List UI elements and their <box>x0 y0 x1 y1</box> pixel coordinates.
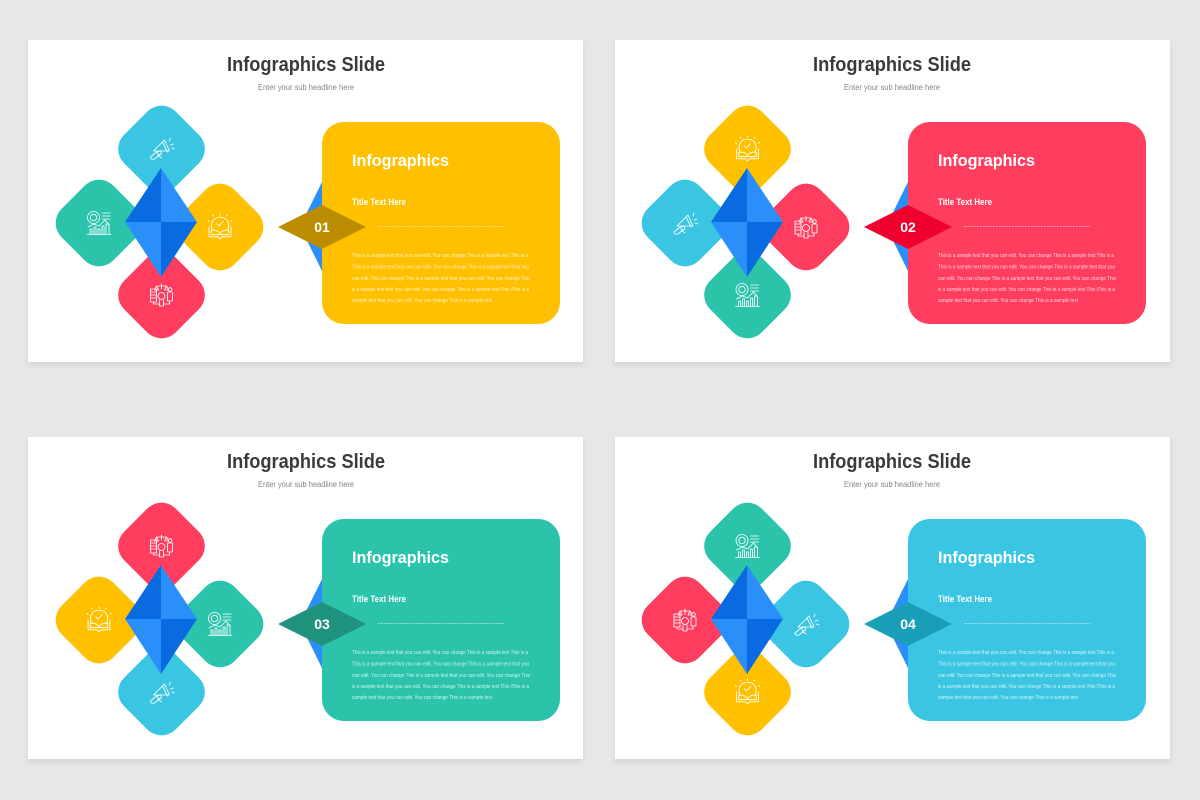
diamond: left book <box>47 568 151 672</box>
card <box>322 122 560 324</box>
card heading: Infographics <box>938 151 1035 170</box>
diamond: left chart <box>47 171 151 275</box>
diamond: right chart <box>168 572 272 676</box>
card body text: sample text that you can edit. You can change This is a sample text <box>938 298 1079 304</box>
card subtitle: Title Text Here <box>352 197 406 207</box>
card body text: This is a sample text that you can edit. You can change This is a sample text that you <box>352 662 529 668</box>
title: Infographics Slide <box>813 54 971 76</box>
number badge 03 <box>278 602 366 646</box>
panel: slide background <box>615 437 1170 759</box>
card body text <box>352 650 530 701</box>
diamond: bottom people <box>110 243 213 347</box>
panel: slide background <box>615 40 1170 362</box>
card subtitle: Title Text Here <box>938 594 992 604</box>
centre blue diamond <box>125 565 197 674</box>
subtitle: Enter your sub headline here <box>844 479 940 489</box>
card subtitle: Title Text Here <box>352 594 406 604</box>
diamond: bottom book <box>696 640 799 744</box>
number badge 04: 04 <box>900 616 916 632</box>
diamond: top megaphone <box>110 97 213 201</box>
title: Infographics Slide <box>227 54 385 76</box>
subtitle: Enter your sub headline here <box>844 82 940 92</box>
card body text: sample text that you can edit. You can change This is a sample text <box>938 695 1079 701</box>
diamond: right book <box>168 175 272 279</box>
number badge 01: 01 <box>314 219 330 235</box>
card body text: This is a sample text that you can edit. You can change This is a sample text This is a <box>938 650 1114 656</box>
card body text: can edit. You can change This is a sample text that you can edit. You can change This <box>938 276 1116 282</box>
card body text: This is a sample text that you can edit. You can change This is a sample text that you <box>938 662 1115 668</box>
number badge 02: 02 <box>900 219 916 235</box>
card body text: This is a sample text that you can edit. You can change This is a sample text This is a <box>352 650 528 656</box>
blue pointer behind card <box>886 579 908 668</box>
number badge 02 <box>864 205 952 249</box>
card body text <box>938 253 1116 304</box>
card body text: can edit. You can change This is a sample text that you can edit. You can change This <box>352 276 530 282</box>
card subtitle: Title Text Here <box>938 197 992 207</box>
card body text: can edit. You can change This is a sample text that you can edit. You can change This <box>938 673 1116 679</box>
diamond: right megaphone <box>754 572 858 676</box>
title: Infographics Slide <box>813 451 971 473</box>
slide 3 <box>28 437 583 759</box>
diamond: top people <box>110 494 213 598</box>
slide 1 <box>28 40 583 362</box>
blue pointer behind card <box>300 579 322 668</box>
subtitle: Enter your sub headline here <box>258 479 354 489</box>
number badge 03: 03 <box>314 616 330 632</box>
blue pointer behind card <box>886 182 908 271</box>
centre blue diamond <box>125 168 197 277</box>
card body text: This is a sample text that you can edit. You can change This is a sample text This is a <box>938 253 1114 259</box>
diamond: bottom chart <box>696 243 799 347</box>
number badge 01 <box>278 205 366 249</box>
diamond: top chart <box>696 494 799 598</box>
diamond: left megaphone <box>633 171 737 275</box>
card body text: is a sample text that you can edit. You can change This is a sample text This iThis is a <box>938 684 1115 690</box>
centre blue diamond <box>711 168 783 277</box>
panel: slide background <box>28 40 583 362</box>
centre blue diamond <box>711 565 783 674</box>
card heading: Infographics <box>352 548 449 567</box>
card heading: Infographics <box>938 548 1035 567</box>
diamond: right people <box>754 175 858 279</box>
panel: slide background <box>28 437 583 759</box>
diamond: top book <box>696 97 799 201</box>
subtitle: Enter your sub headline here <box>258 82 354 92</box>
card heading: Infographics <box>352 151 449 170</box>
card body text: can edit. You can change This is a sample text that you can edit. You can change This <box>352 673 530 679</box>
card body text: is a sample text that you can edit. You can change This is a sample text This iThis is a <box>352 287 529 293</box>
card body text: is a sample text that you can edit. You can change This is a sample text This iThis is a <box>938 287 1115 293</box>
card body text: sample text that you can edit. You can change This is a sample text <box>352 298 493 304</box>
diamond: bottom megaphone <box>110 640 213 744</box>
card body text: This is a sample text that you can edit. You can change This is a sample text This is a <box>352 253 528 259</box>
card body text: is a sample text that you can edit. You can change This is a sample text This iThis is a <box>352 684 529 690</box>
card body text <box>352 253 530 304</box>
blue pointer behind card <box>300 182 322 271</box>
card <box>908 122 1146 324</box>
card <box>322 519 560 721</box>
title: Infographics Slide <box>227 451 385 473</box>
slide 2 <box>615 40 1170 362</box>
card body text <box>938 650 1116 701</box>
diamond: left people <box>633 568 737 672</box>
card body text: sample text that you can edit. You can change This is a sample text <box>352 695 493 701</box>
card body text: This is a sample text that you can edit. You can change This is a sample text that you <box>938 264 1115 270</box>
slide 4 <box>615 437 1170 759</box>
number badge 04 <box>864 602 952 646</box>
card body text: This is a sample text that you can edit. You can change This is a sample text that you <box>352 264 529 270</box>
card <box>908 519 1146 721</box>
